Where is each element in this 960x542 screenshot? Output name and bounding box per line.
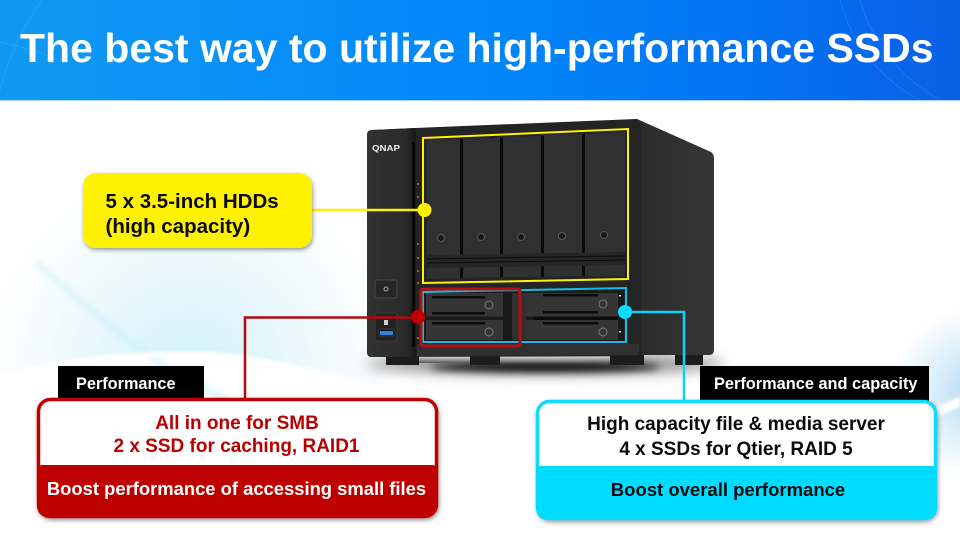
panel: performance <box>37 400 437 517</box>
tag: Performance: Performance <box>76 375 176 393</box>
HDD bays <box>427 132 625 279</box>
connector: red <box>245 310 425 400</box>
NAS device <box>365 119 725 374</box>
callout: HDDs: (high capacity) <box>106 215 250 238</box>
USB port <box>375 313 397 341</box>
front panel <box>367 119 641 357</box>
panel: performance and capacity: 4 x SSDs for Qtier, RAID 5 <box>619 439 853 460</box>
yellow highlight: HDD bays <box>423 129 628 283</box>
power button <box>375 280 397 298</box>
connector: yellow <box>312 203 432 217</box>
red highlight: two SSD bays <box>421 289 520 346</box>
bay buttons <box>438 232 608 242</box>
tag: Performance <box>58 366 204 400</box>
bay latches <box>427 252 625 268</box>
QNAP logo: QNAP <box>372 143 400 153</box>
callout: HDDs: 5 x 3.5-inch HDDs <box>106 190 279 213</box>
callout: HDDs <box>83 173 312 248</box>
floor gaps <box>419 357 610 363</box>
panel: performance and capacity: High capacity file & media server <box>587 414 886 435</box>
panel: performance: 2 x SSD for caching, RAID1 <box>113 436 360 457</box>
SSD bays <box>423 291 624 343</box>
bay gaps <box>460 134 585 278</box>
panel: performance: All in one for SMB <box>155 413 319 434</box>
feet <box>386 354 703 365</box>
panel: performance and capacity <box>536 402 937 520</box>
blue highlight: SSD bays <box>423 288 626 342</box>
panel: performance: Boost performance of accessing small files <box>47 478 426 499</box>
floor shadow <box>365 354 725 374</box>
side panel <box>637 119 714 355</box>
cyan footer band <box>536 466 937 520</box>
status LEDs <box>417 183 419 339</box>
panel: performance and capacity: Boost overall performance <box>611 479 845 500</box>
tag: Performance and capacity <box>700 366 929 401</box>
title: The best way to utilize high-performance SSDs <box>20 25 934 71</box>
header arcs <box>0 0 940 100</box>
tag: Performance and capacity: Performance and capacity <box>714 375 917 393</box>
header banner <box>0 0 960 100</box>
connector: blue <box>618 305 684 402</box>
red footer band <box>37 465 437 517</box>
left control strip <box>367 128 416 357</box>
